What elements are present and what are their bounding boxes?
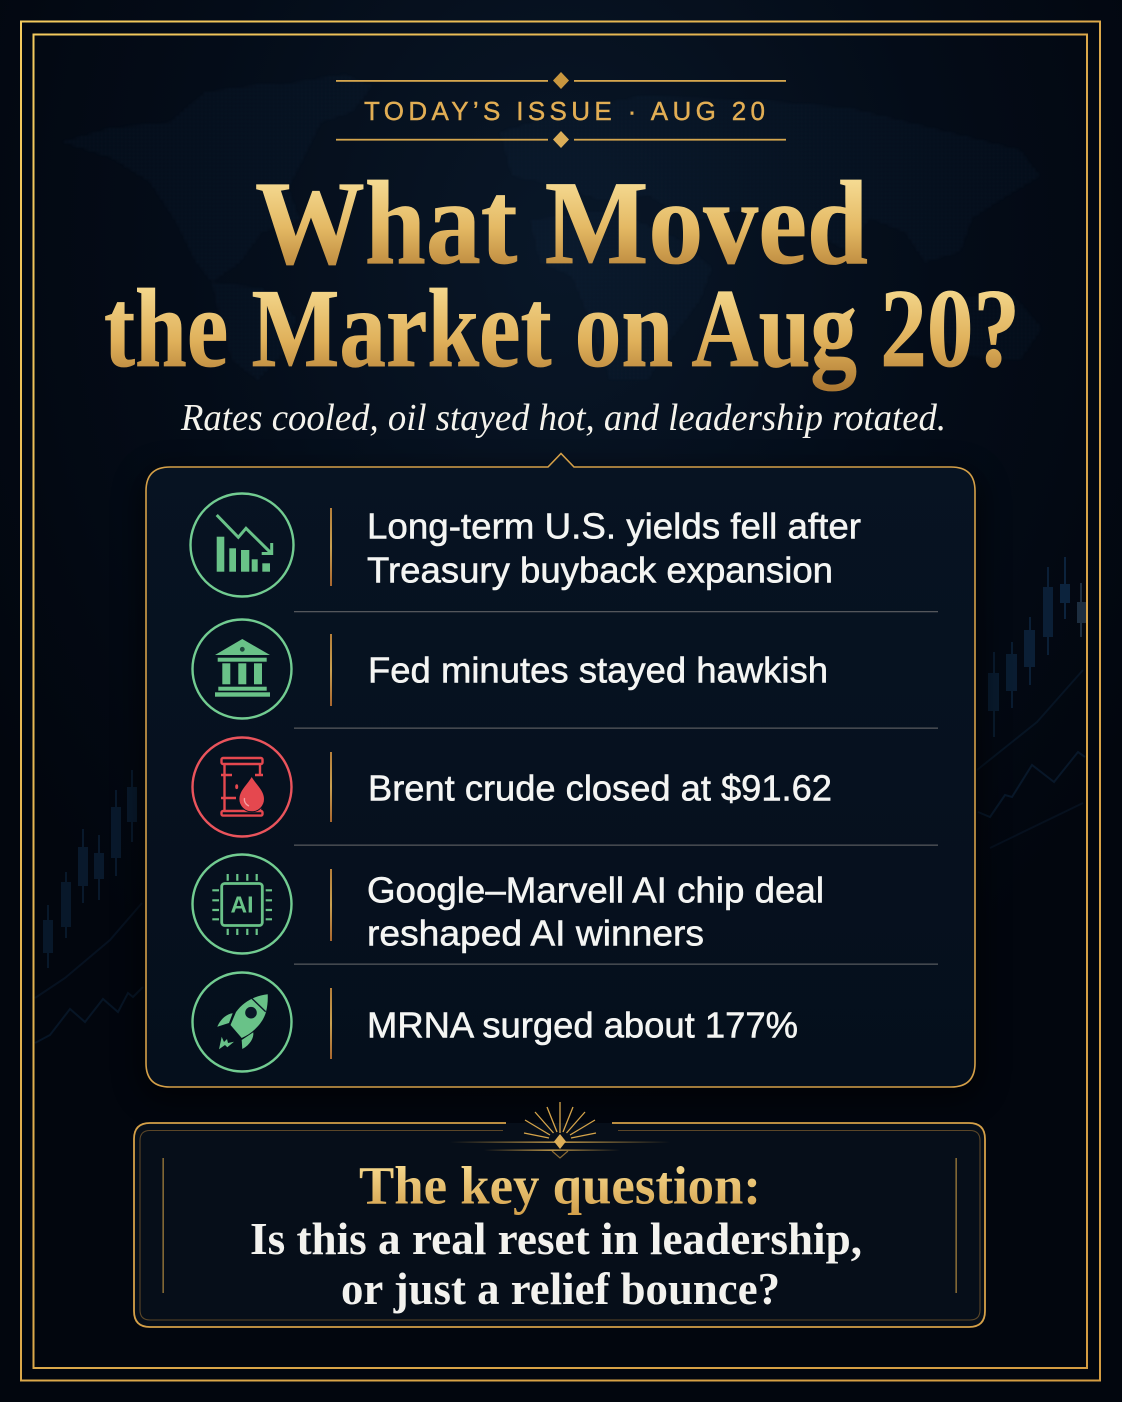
row 4 text — [367, 870, 824, 954]
right candle 6 — [1077, 583, 1087, 637]
row 3 divider — [330, 752, 332, 822]
icon: oil barrel and drop — [192, 738, 292, 836]
header label: TODAY’S ISSUE · AUG 20 — [364, 96, 765, 126]
left candle 6 — [127, 770, 137, 842]
subtitle: Rates cooled, oil stayed hot, and leadership rotated. — [180, 397, 946, 439]
icon: AI chip — [192, 854, 292, 954]
callout question: Is this a real reset in leadership, — [250, 1213, 862, 1264]
row 1 text: Long-term U.S. yields fell after — [367, 506, 861, 546]
row 5 text: MRNA surged about 177% — [367, 1004, 798, 1046]
row 4 text: Google–Marvell AI chip deal — [367, 870, 824, 910]
row 4 text: reshaped AI winners — [367, 912, 704, 954]
row 2: Fed — [192, 620, 828, 718]
row 4: AI chip — [192, 854, 824, 954]
right candle 1 — [988, 652, 999, 737]
panel card — [146, 454, 975, 1087]
icon: falling bar chart — [190, 494, 294, 596]
callout side rules — [162, 1158, 957, 1293]
left candle 1 — [43, 905, 53, 968]
title line 1: What Moved — [255, 156, 868, 289]
row 3 text: Brent crude closed at $91.62 — [368, 768, 832, 808]
left candle 3 — [78, 829, 88, 903]
callout inner border — [140, 1130, 980, 1320]
row 1 text: Treasury buyback expansion — [367, 550, 833, 590]
title — [104, 156, 1020, 391]
panel: market movers list — [140, 454, 982, 1100]
row separators — [294, 611, 938, 965]
left trend lines — [35, 903, 143, 1043]
right candle 3 — [1024, 617, 1035, 685]
row 1: yields — [190, 494, 861, 596]
left candle 2 — [61, 872, 71, 938]
row 3: oil — [192, 738, 832, 836]
background chart: left candlesticks — [35, 770, 143, 1043]
icon: rocket — [192, 972, 292, 1072]
right candle 2 — [1006, 642, 1017, 708]
row 4 divider — [330, 869, 332, 941]
issue header — [336, 72, 786, 148]
header bottom diamond — [553, 131, 569, 148]
callout question — [250, 1213, 862, 1314]
panel: key question callout — [134, 1102, 985, 1327]
header bottom rule — [336, 139, 786, 141]
row 1 divider — [330, 508, 332, 586]
row 5: MRNA — [192, 972, 798, 1072]
icon: bank building — [192, 620, 292, 718]
row 2 text: Fed minutes stayed hawkish — [368, 650, 828, 690]
header top rule — [336, 80, 786, 82]
background chart: right candlesticks — [977, 557, 1087, 848]
panel shadow — [140, 470, 982, 1100]
header top diamond — [553, 72, 569, 89]
icon: AI chip: AI — [230, 892, 254, 918]
right trend lines — [977, 670, 1085, 848]
callout background — [134, 1123, 985, 1327]
left candle 5 — [111, 790, 121, 876]
background world map — [62, 74, 1042, 380]
callout question: or just a relief bounce? — [341, 1263, 780, 1314]
row 5 divider — [330, 988, 332, 1059]
icon: sunburst ornament — [450, 1102, 670, 1158]
row 2 divider — [330, 634, 332, 706]
callout heading: The key question: — [359, 1156, 761, 1216]
right candle 5 — [1060, 557, 1070, 619]
right candle 4 — [1043, 567, 1053, 655]
left candle 4 — [94, 835, 104, 900]
row 1 text — [367, 506, 861, 590]
